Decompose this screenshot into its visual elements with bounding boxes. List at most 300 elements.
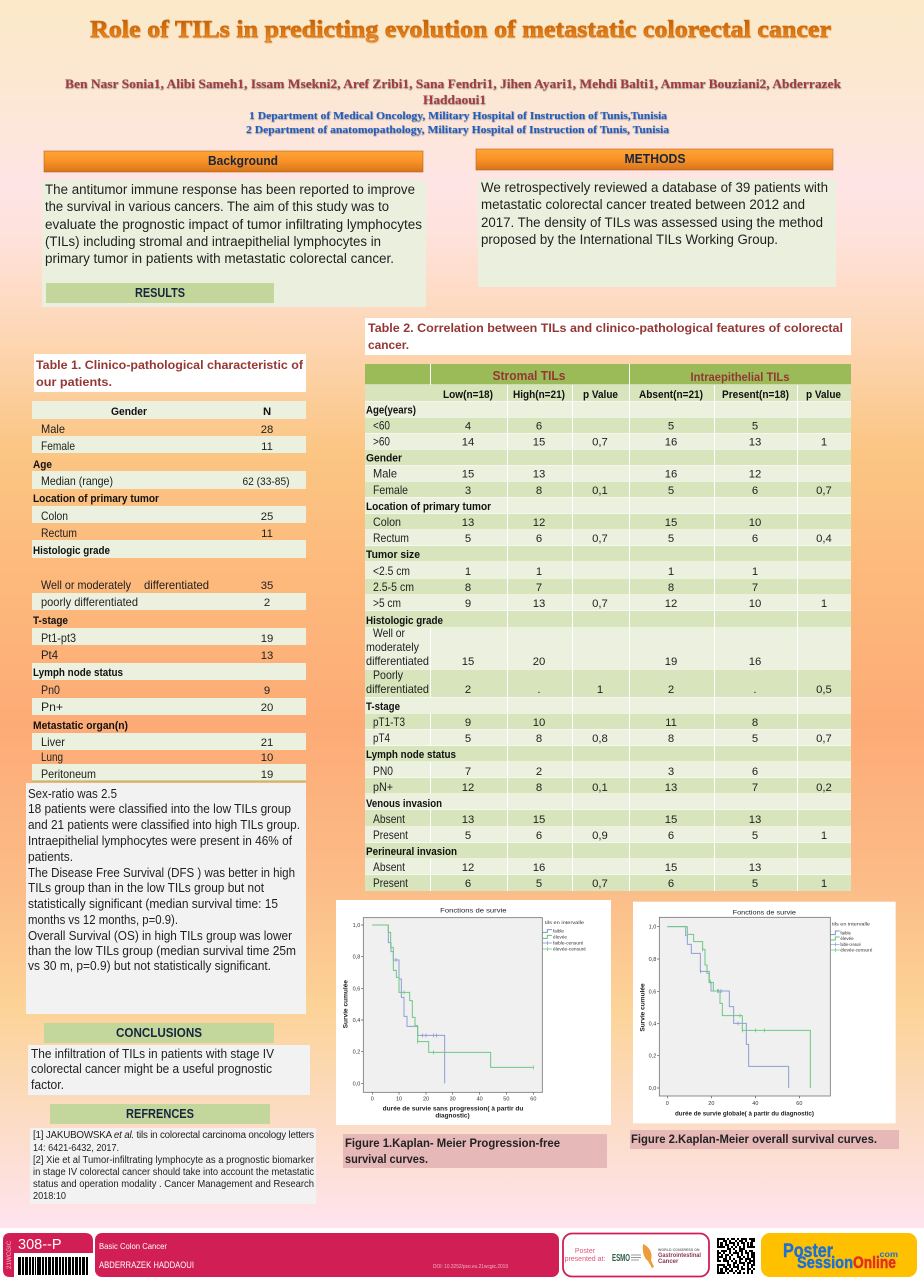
legend: faible	[840, 930, 851, 936]
row: pT4: 0,8	[592, 733, 608, 745]
poster id panel: 21WCGIC	[6, 1240, 13, 1269]
logo: congress name: Gastrointestinal	[658, 1253, 701, 1259]
row: 2.5-5 cm: 8	[465, 582, 471, 594]
row: under 60: <60	[373, 420, 390, 432]
logo: congress name: WORLD CONGRESS ON	[658, 1248, 700, 1252]
row: female: 11	[261, 441, 273, 453]
row: perineural present	[365, 875, 851, 891]
category and author panel: Basic Colon Cancer	[99, 1241, 167, 1251]
x axis tick labels	[371, 1096, 536, 1102]
row: colon: 10	[749, 517, 761, 529]
row: over 60: 16	[665, 436, 677, 448]
curve: low TILs	[667, 927, 789, 1088]
affiliations: 1 Department of Medical Oncology, Military Hospital of Instruction of Tunis,Tunisia	[249, 111, 668, 122]
title: Role of TILs in predicting evolution of metastatic colorectal cancer	[90, 17, 831, 43]
panel: methods text	[478, 179, 836, 287]
row: over 5 cm: 10	[749, 598, 761, 610]
row: PN0: 3	[668, 766, 674, 778]
panel: results text: Intraepithelial lymphocytes were present in 46% of	[28, 834, 292, 848]
row: tumor size: Tumor size	[366, 549, 420, 561]
row: rectum: 6	[752, 533, 758, 545]
row: colon	[365, 514, 851, 530]
row: poorly differentiated: poorly differentiated	[41, 596, 138, 609]
row: colon: Colon	[41, 510, 68, 523]
category and author panel	[95, 1233, 559, 1277]
row: under 2.5 cm: 1	[536, 566, 542, 578]
row: male: 16	[665, 468, 677, 480]
legend: faible-censuré	[840, 942, 861, 948]
row: 2.5-5 cm: 8	[668, 582, 674, 594]
row: 2.5-5 cm	[365, 578, 851, 594]
legend: élevée	[840, 936, 854, 942]
y axis tick labels: 0,6	[649, 989, 656, 995]
panel: results text: than the low TILs group (median survival time 25m	[28, 944, 296, 958]
header row: groups	[365, 364, 851, 384]
curve: high TILs	[667, 927, 810, 1088]
row: lung: 10	[261, 752, 273, 764]
x axis tick labels: 40	[752, 1101, 758, 1107]
y axis tick labels	[649, 925, 656, 1092]
row: pN+: pN+	[373, 781, 393, 794]
row: well or moderately differentiated: moderately	[366, 641, 419, 654]
y axis title: Survie cumulée	[640, 983, 646, 1032]
row: lymph node status	[32, 663, 306, 680]
row: under 2.5 cm: 1	[752, 566, 758, 578]
row: pt1-pt3: 19	[261, 633, 273, 645]
affiliations: 2 Department of anatomopathology, Military Hospital of Instruction of Tunis, Tunisia	[246, 125, 670, 136]
row: pt4	[41, 649, 273, 662]
panel: conclusions text: factor.	[31, 1078, 64, 1092]
row: perineural present: 5	[536, 878, 542, 890]
row: median: 62 (33-85)	[242, 476, 290, 488]
row: colon: 12	[533, 517, 545, 529]
row: venous present: 6	[536, 830, 542, 842]
panel: results text: and 21 patients were classified into high TILs group.	[28, 818, 300, 832]
row: perineural present: Present	[373, 877, 409, 890]
row: venous absent: Absent	[373, 813, 406, 826]
heading: methods	[476, 149, 833, 170]
row: female: Female	[373, 484, 408, 497]
row: female	[365, 482, 851, 497]
row: venous present: 0,9	[592, 830, 608, 842]
logo: congress name	[658, 1248, 701, 1265]
legend: élevée-censuré	[553, 947, 586, 953]
x axis tick labels: 20	[708, 1101, 714, 1107]
axis ticks	[361, 925, 533, 1095]
row: histologic grade: Histologic grade	[366, 615, 443, 627]
row: poorly differentiated: 2	[668, 684, 674, 696]
row: pn0: 9	[264, 685, 270, 697]
chart title: Fonctions de survie	[440, 907, 507, 914]
heading: methods: METHODS	[624, 152, 686, 166]
row: perineural absent: 15	[665, 862, 677, 874]
legend: faible-censuré	[553, 941, 584, 947]
panel: results text: patients.	[28, 850, 73, 864]
row: rectum	[365, 530, 851, 546]
censor marks	[700, 969, 738, 1025]
header row: columns: Absent(n=21)	[639, 389, 703, 401]
row: t-stage: T-stage	[366, 701, 400, 713]
row: well differentiated: 35	[261, 580, 273, 592]
row: male: 28	[261, 424, 273, 436]
row: perineural absent: 12	[462, 862, 474, 874]
row: over 60: >60	[373, 436, 390, 448]
row: pN+: 7	[752, 782, 758, 794]
row: colon: 13	[462, 517, 474, 529]
chart: Kaplan-Meier overall survival	[633, 902, 896, 1123]
row: lymph node status: Lymph node status	[366, 749, 456, 761]
row: perineural present: 6	[668, 878, 674, 890]
panel: results text	[26, 783, 306, 1014]
legend: élevée	[553, 935, 567, 941]
row: lymph node status: Lymph node status	[33, 667, 123, 679]
row: rectum: 5	[465, 533, 471, 545]
row: pn+: 20	[261, 702, 273, 714]
row: over 60	[365, 434, 851, 449]
row: age: Age	[33, 459, 52, 471]
legend: faible	[553, 929, 564, 935]
legend: tils en intervalle	[832, 922, 870, 928]
row: poorly differentiated: Poorly	[373, 669, 403, 682]
row: median	[32, 471, 306, 489]
curve: high TILs	[372, 925, 533, 1067]
header row: columns: p Value	[583, 389, 618, 401]
panel: references text: 2018:10	[33, 1191, 67, 1202]
row: location: Location of primary tumor	[366, 501, 492, 513]
row: well differentiated: differentiated	[144, 579, 209, 592]
row: venous present	[365, 827, 851, 842]
row: venous absent: 13	[462, 814, 474, 826]
row: location	[365, 498, 851, 514]
row: poorly differentiated	[32, 593, 306, 610]
row: 2.5-5 cm: 2.5-5 cm	[373, 581, 414, 594]
heading: conclusions	[44, 1023, 274, 1043]
panel: background text: the survival in various cancers. The aim of this study was to	[45, 199, 389, 214]
y axis tick labels: 0,6	[353, 986, 360, 992]
row: colon: 25	[261, 511, 273, 523]
panel: methods text: proposed by the International TILs Working Group.	[481, 232, 778, 247]
row: perineural absent: 16	[533, 862, 545, 874]
authors: Ben Nasr Sonia1, Alibi Sameh1, Issam Msekni2, Aref Zribi1, Sana Fendri1, Jihen Ayari1, Mehdi Balti1, Ammar Bouziani2, Abderrazek	[65, 76, 842, 91]
x axis tick labels: 20	[423, 1096, 429, 1102]
panel: references text: [2] Xie et al Tumor-infiltrating lymphocyte as a prognostic biomarker	[33, 1155, 315, 1166]
caption: figure 1: survival curves.	[345, 1152, 428, 1166]
y axis tick labels: 0,8	[649, 957, 656, 963]
row: well differentiated	[41, 579, 273, 592]
row: venous invasion: Venous invasion	[366, 798, 442, 810]
y axis tick labels	[353, 923, 360, 1087]
panel: references text	[30, 1128, 316, 1204]
x axis title: durée de survie globale( à partir du diagnostic)	[675, 1111, 814, 1117]
row: under 60: 4	[465, 420, 471, 432]
x axis tick labels: 10	[396, 1096, 402, 1102]
row: pT1-T3: 10	[533, 717, 545, 729]
panel: conclusions text: colorectal cancer might be a useful prognostic	[31, 1062, 272, 1076]
logo panel: PosterSessionOnline: Online	[853, 1253, 896, 1272]
caption: figure 2: Figure 2.Kaplan-Meier overall survival curves.	[631, 1132, 877, 1146]
curve: low TILs	[372, 925, 445, 1083]
row: under 2.5 cm: 1	[668, 566, 674, 578]
row: well or moderately differentiated	[365, 627, 851, 669]
logo panel: PosterSessionOnline: Session	[797, 1253, 853, 1272]
heading: table 1 title: Table 1. Clinico-pathological characteristic of	[36, 358, 304, 372]
header row: groups: Stromal TILs	[492, 368, 566, 383]
row: pN+: 12	[462, 782, 474, 794]
panel: results text: TILs group than in the low TILs group but not	[28, 881, 264, 895]
logo panel: PosterSessionOnline: .com	[877, 1250, 898, 1259]
row: over 60: 1	[821, 436, 827, 448]
row: over 5 cm: 0,7	[592, 598, 608, 610]
row: pt1-pt3	[32, 628, 306, 645]
row: rectum: 5	[668, 533, 674, 545]
row: well or moderately differentiated: 19	[665, 656, 677, 668]
row: venous present: Present	[373, 829, 409, 842]
row: PN0	[365, 762, 851, 778]
row: well or moderately differentiated: differentiated	[366, 655, 429, 668]
heading: table 1 title	[34, 354, 306, 392]
row: pn0: Pn0	[41, 684, 60, 697]
row: well or moderately differentiated: 15	[462, 656, 474, 668]
row: perineural invasion	[365, 843, 851, 858]
logo panel: PosterSessionOnline	[761, 1233, 917, 1277]
y axis tick labels: 0,4	[353, 1018, 360, 1024]
row: male	[41, 423, 273, 436]
row: rectum	[41, 527, 273, 540]
row: rectum: Rectum	[41, 527, 77, 540]
panel: references text: status and operation modality . Cancer Management and Research	[33, 1179, 314, 1190]
poster presented at panel	[563, 1234, 709, 1276]
heading: table 2 title: Table 2. Correlation between TILs and clinico-pathological features of colorectal	[368, 321, 843, 335]
authors: Haddaoui1	[423, 92, 486, 107]
row: peritoneum	[32, 764, 306, 782]
panel: references text: [1] JAKUBOWSKA et al. tils in colorectal carcinoma oncology letters	[33, 1130, 314, 1141]
row: pT1-T3: pT1-T3	[373, 716, 405, 729]
row: poorly differentiated: .	[537, 684, 541, 696]
row: under 60	[365, 418, 851, 433]
table 2: correlation table	[365, 364, 851, 891]
row: perineural invasion: Perineural invasion	[366, 846, 457, 858]
row: over 5 cm: >5 cm	[373, 597, 401, 610]
row: pn+	[32, 698, 306, 715]
row: histologic grade	[32, 540, 306, 558]
row: 2.5-5 cm: 7	[752, 582, 758, 594]
legend	[830, 922, 873, 954]
row: poorly differentiated: differentiated	[366, 683, 429, 696]
header row: columns: Present(n=18)	[722, 389, 789, 401]
y axis tick labels: 0,4	[649, 1022, 656, 1028]
x axis title line 2: diagnostic)	[435, 1113, 470, 1119]
row: t-stage: T-stage	[33, 615, 68, 627]
row: pn0	[41, 684, 270, 697]
row: age	[365, 402, 851, 417]
panel: background text: (TILs) including stromal and intraepithelial lymphocytes in	[45, 234, 381, 249]
heading: references	[50, 1104, 270, 1124]
row: over 5 cm: 13	[533, 598, 545, 610]
row: perineural absent	[365, 859, 851, 874]
table backing	[365, 364, 851, 891]
plot area	[659, 917, 830, 1096]
caption: figure 1	[343, 1134, 607, 1168]
row: male: 15	[462, 468, 474, 480]
legend: tils en intervalle	[545, 920, 584, 926]
table 1: clinico-pathological characteristics	[32, 401, 306, 782]
row: female: 0,7	[816, 485, 832, 497]
row: rectum: 6	[536, 533, 542, 545]
heading: results: RESULTS	[135, 286, 185, 300]
row: male: 13	[533, 468, 545, 480]
row: 2.5-5 cm: 7	[536, 582, 542, 594]
row: venous absent: 15	[533, 814, 545, 826]
footer strip	[0, 1228, 924, 1280]
heading: results	[46, 283, 274, 303]
row: male: 12	[749, 468, 761, 480]
panel: conclusions text: The infiltration of TILs in patients with stage IV	[31, 1047, 275, 1061]
row: under 2.5 cm: <2.5 cm	[373, 565, 410, 578]
row: gender: Gender	[366, 452, 403, 464]
panel: references text: 14: 6421-6432, 2017.	[33, 1143, 119, 1154]
panel: results text: The Disease Free Survival (DFS ) was better in high	[28, 866, 295, 880]
x axis tick labels: 30	[450, 1096, 456, 1102]
poster presented at panel: presented at:	[565, 1256, 605, 1263]
logo: ESMO: ESMO	[612, 1253, 630, 1264]
panel: background text: primary tumor in patients with metastatic colorectal cancer.	[45, 251, 394, 266]
chart title: Fonctions de survie	[733, 909, 797, 916]
row: pN+: 0,2	[816, 782, 832, 794]
row: female: Female	[41, 440, 75, 453]
x axis tick labels: 60	[796, 1101, 802, 1107]
row: under 60: 5	[752, 420, 758, 432]
row: pN+: 8	[536, 782, 542, 794]
row: poorly differentiated: .	[753, 684, 757, 696]
x axis tick labels: 0	[666, 1101, 669, 1107]
row: PN0: PN0	[373, 765, 393, 778]
row: under 60: 6	[536, 420, 542, 432]
row: female: 3	[465, 485, 471, 497]
row: male	[365, 466, 851, 481]
row: liver: 21	[261, 737, 273, 749]
header row: columns: Low(n=18)	[443, 389, 493, 401]
heading: background	[44, 151, 423, 172]
y axis tick labels: 0,8	[353, 955, 360, 961]
row: rectum: Rectum	[373, 532, 409, 545]
row: pt4: Pt4	[41, 649, 59, 662]
row: well or moderately differentiated: Well or	[373, 627, 405, 640]
row: liver: Liver	[41, 736, 65, 749]
row: pT4: 5	[752, 733, 758, 745]
row: over 5 cm: 1	[821, 598, 827, 610]
row: over 5 cm: 9	[465, 598, 471, 610]
row: pt4: 13	[261, 650, 273, 662]
row: pN+	[365, 778, 851, 794]
legend: élevée-censuré	[840, 948, 873, 954]
row: pt1-pt3: Pt1-pt3	[41, 632, 76, 645]
row: venous absent	[365, 810, 851, 826]
y axis title: Survie cumulée	[343, 979, 349, 1028]
row: poorly differentiated: 2	[264, 597, 270, 609]
chart: Kaplan-Meier progression-free survival	[336, 900, 611, 1125]
x axis tick labels: 40	[477, 1096, 483, 1102]
panel: methods text: metastatic colorectal cancer treated between 2012 and	[481, 197, 805, 212]
row: PN0: 6	[752, 766, 758, 778]
heading: conclusions: CONCLUSIONS	[116, 1026, 202, 1040]
caption: figure 1: Figure 1.Kaplan- Meier Progression-free	[345, 1136, 560, 1150]
x axis tick labels	[666, 1101, 802, 1107]
row: venous present: 5	[465, 830, 471, 842]
row: pn+: Pn+	[41, 701, 63, 714]
row: well or moderately differentiated: 16	[749, 656, 761, 668]
row: pT1-T3	[365, 714, 851, 729]
row: well or moderately differentiated: 20	[533, 656, 545, 668]
plot area	[363, 918, 542, 1092]
y axis tick labels: 0,0	[353, 1081, 360, 1087]
row: female	[32, 436, 306, 453]
row: pT1-T3: 8	[752, 717, 758, 729]
icon: QR code	[717, 1239, 755, 1273]
barcode	[18, 1257, 88, 1275]
row: peritoneum: Peritoneum	[41, 768, 96, 781]
row: PN0: 2	[536, 766, 542, 778]
header row: groups: Intraepithelial TILs	[690, 371, 790, 384]
row: perineural present: 6	[465, 878, 471, 890]
row: venous present: 6	[668, 830, 674, 842]
censor marks	[396, 958, 436, 1037]
row: median: Median (range)	[41, 475, 113, 488]
row: poorly differentiated: 0,5	[816, 684, 832, 696]
panel: background text	[42, 180, 426, 307]
y axis tick labels: 0,0	[649, 1086, 656, 1092]
row: colon: Colon	[373, 516, 401, 529]
row: histologic grade: Histologic grade	[33, 545, 110, 557]
row: tumor size	[365, 546, 851, 562]
row: pT4: 5	[465, 733, 471, 745]
panel: methods text: 2017. The density of TILs was assessed using the method	[481, 215, 823, 230]
row: perineural present: 5	[752, 878, 758, 890]
row: liver	[32, 733, 306, 750]
row: metastatic organ: Metastatic organ(n)	[33, 720, 128, 732]
heading: table 2 title	[365, 318, 851, 355]
row: perineural absent: 13	[749, 862, 761, 874]
logo: congress name: Cancer	[658, 1259, 679, 1265]
row: rectum: 11	[261, 528, 273, 540]
row: lymph node status	[365, 746, 851, 762]
row: female: 5	[668, 485, 674, 497]
heading: references: REFRENCES	[126, 1107, 194, 1121]
x axis title: durée de survie sans progression( à partir du	[383, 1107, 524, 1113]
category and author panel: DOI: 10.3252/pso.eu.21wcgic.2019	[433, 1264, 508, 1270]
heading: table 1 title: our patients.	[36, 375, 112, 389]
panel: conclusions text	[28, 1045, 310, 1095]
row: pT4: 8	[668, 733, 674, 745]
y axis tick labels: 0,2	[353, 1050, 360, 1056]
row: female: 6	[752, 485, 758, 497]
row: colon: 15	[665, 517, 677, 529]
x axis tick labels: 60	[530, 1096, 536, 1102]
row: over 60: 0,7	[592, 436, 608, 448]
row: peritoneum: 19	[261, 769, 273, 781]
heading: table 2 title: cancer.	[368, 338, 409, 352]
row: under 2.5 cm: 1	[465, 566, 471, 578]
legend	[542, 920, 586, 953]
row: poorly differentiated: 2	[465, 684, 471, 696]
row: lung	[41, 751, 273, 764]
panel: references text: in stage IV colorectal cancer should take into account the metastatic	[33, 1167, 314, 1178]
row: under 60: 5	[668, 420, 674, 432]
x axis tick labels: 50	[503, 1096, 509, 1102]
panel: background text: evaluate the prognostic impact of tumor infiltrating lymphocytes	[45, 217, 422, 232]
row: age: Age(years)	[366, 404, 416, 416]
axis ticks	[657, 927, 799, 1098]
poster presented at panel: Poster	[575, 1248, 596, 1255]
